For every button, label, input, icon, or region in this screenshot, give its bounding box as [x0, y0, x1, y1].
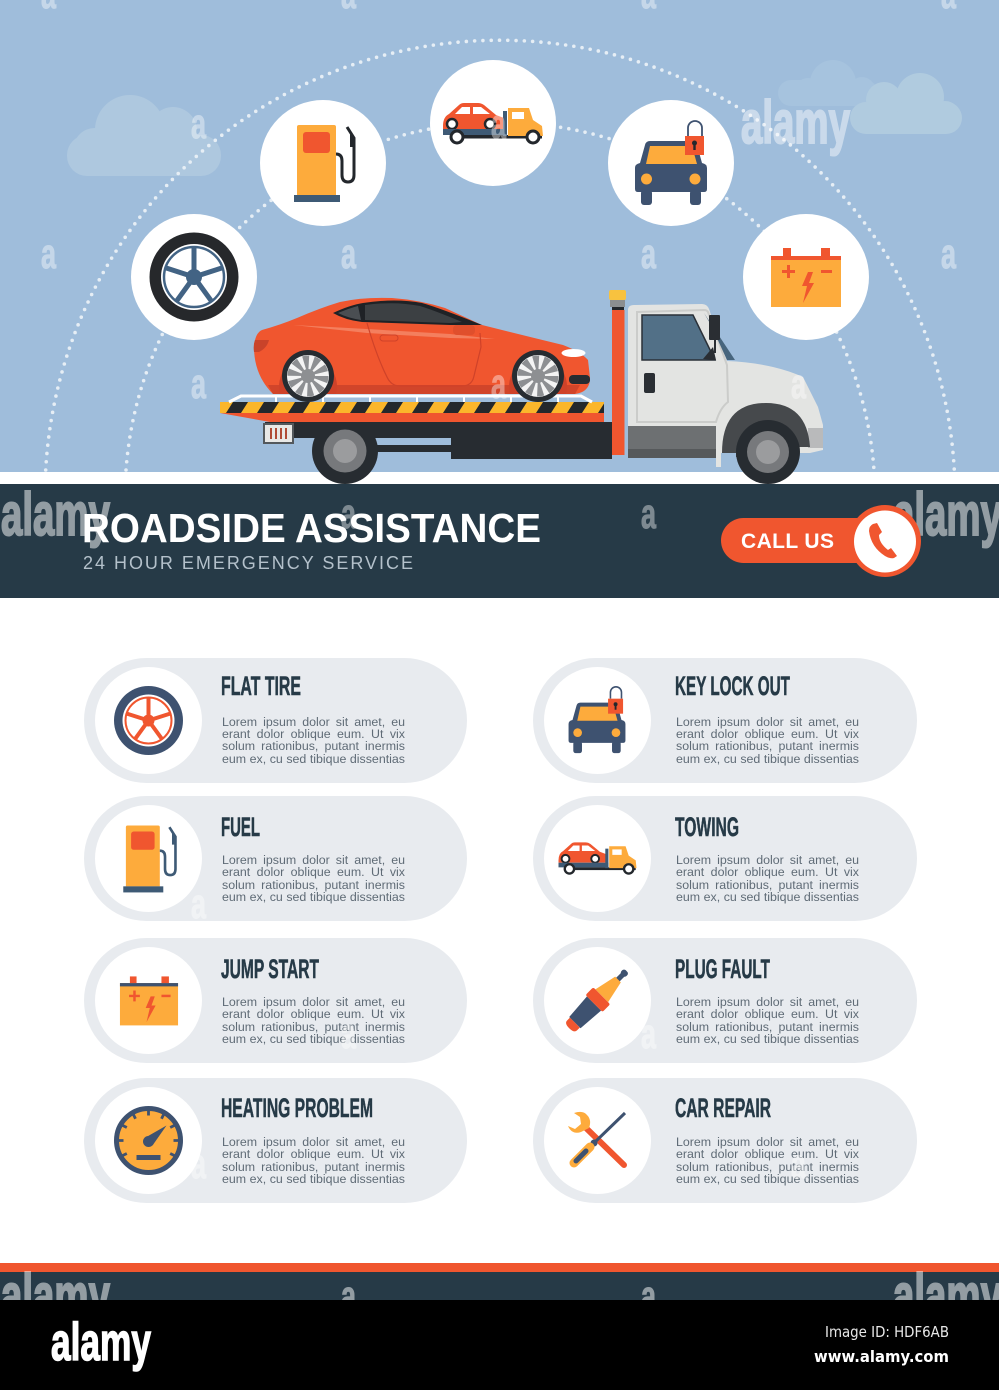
orange stripe: [0, 1263, 999, 1272]
car rear wheel: [279, 350, 337, 402]
watermarks: a: [791, 360, 806, 407]
cloud right back: [778, 60, 878, 106]
banner background: [0, 484, 999, 598]
card: towing: [533, 796, 917, 921]
wheel front: [736, 420, 800, 484]
description: Lorem ipsum dolor sit amet, eu: [222, 714, 405, 728]
watermarks: a: [191, 1140, 206, 1187]
description: [676, 1135, 859, 1186]
tow truck: [220, 290, 823, 484]
watermarks: a: [791, 1140, 806, 1187]
description: eum ex, cu sed tibique dissentias: [676, 752, 859, 766]
watermarks: a: [641, 490, 656, 537]
watermarks: a: [641, 1010, 656, 1057]
description: solum rationibus, putant inermis: [676, 878, 859, 892]
icon: fuel: [123, 825, 176, 892]
footer watermarks: [1, 1262, 999, 1329]
icon: tire: [114, 686, 183, 755]
watermarks: a: [41, 230, 56, 277]
ground strip: [0, 472, 999, 484]
circle icon: fuel: [260, 100, 386, 226]
cab: [628, 304, 823, 467]
description: erant dolor oblique eum. Ut vix: [676, 727, 859, 741]
watermarks: a: [191, 880, 206, 927]
dark stripe: [0, 1272, 999, 1300]
hero illustration: [0, 0, 999, 484]
rear light box: [264, 424, 293, 443]
footer watermarks: a: [641, 1272, 656, 1319]
truck chassis: [265, 422, 612, 459]
title: FUEL: [221, 812, 260, 842]
dotted arc outer: [46, 40, 954, 470]
description: erant dolor oblique eum. Ut vix: [222, 727, 405, 741]
title: CAR REPAIR: [675, 1093, 771, 1123]
description: eum ex, cu sed tibique dissentias: [222, 1172, 405, 1186]
description: erant dolor oblique eum. Ut vix: [222, 865, 405, 879]
subtitle: 24 HOUR EMERGENCY SERVICE: [83, 553, 413, 573]
circle icon: towing: [430, 60, 556, 186]
cloud right front: [850, 73, 962, 134]
icon: gauge: [116, 1108, 180, 1172]
title: JUMP START: [221, 954, 319, 984]
footer watermarks: alamy: [1, 1263, 110, 1329]
watermarks: a: [941, 230, 956, 277]
description: [222, 853, 405, 904]
stock logo: alamy: [51, 1313, 151, 1372]
watermarks: a: [341, 490, 356, 537]
description: erant dolor oblique eum. Ut vix: [676, 1147, 859, 1161]
description: eum ex, cu sed tibique dissentias: [222, 890, 405, 904]
description: Lorem ipsum dolor sit amet, eu: [676, 853, 859, 867]
description: [222, 714, 405, 766]
description: erant dolor oblique eum. Ut vix: [222, 1147, 405, 1161]
description: solum rationibus, putant inermis: [676, 1160, 859, 1174]
description: solum rationibus, putant inermis: [222, 1160, 405, 1174]
description: eum ex, cu sed tibique dissentias: [676, 1032, 859, 1046]
title: TOWING: [675, 812, 739, 842]
title: PLUG FAULT: [675, 954, 770, 984]
banner: [0, 484, 999, 598]
card: jump start: [84, 938, 467, 1063]
icon: spark plug: [561, 963, 635, 1037]
card: heating problem: [84, 1078, 467, 1203]
description: erant dolor oblique eum. Ut vix: [222, 1007, 405, 1021]
watermarks: a: [491, 100, 506, 147]
circle icon: battery: [743, 214, 869, 340]
watermarks: a: [191, 360, 206, 407]
description: erant dolor oblique eum. Ut vix: [676, 1007, 859, 1021]
description: eum ex, cu sed tibique dissentias: [222, 1032, 405, 1046]
wheel rear: [312, 418, 378, 484]
description: [676, 714, 859, 766]
card: fuel: [84, 796, 467, 921]
description: eum ex, cu sed tibique dissentias: [676, 1172, 859, 1186]
description: [222, 1135, 405, 1186]
icon: phone: [869, 523, 897, 558]
flatbed: [220, 396, 604, 422]
icon: tow truck: [558, 842, 636, 874]
sky: [0, 0, 999, 472]
call us button: [721, 505, 921, 577]
watermarks: a: [341, 1010, 356, 1057]
wheel arch: [722, 403, 810, 457]
circle icon: tire: [131, 214, 257, 340]
main title: ROADSIDE ASSISTANCE: [82, 505, 541, 551]
description: solum rationibus, putant inermis: [676, 739, 859, 753]
icon: tools: [568, 1112, 625, 1165]
description: Lorem ipsum dolor sit amet, eu: [222, 995, 405, 1009]
description: Lorem ipsum dolor sit amet, eu: [676, 995, 859, 1009]
description: eum ex, cu sed tibique dissentias: [676, 890, 859, 904]
description: Lorem ipsum dolor sit amet, eu: [222, 853, 405, 867]
black stock bar: [0, 1300, 999, 1390]
icon: battery: [120, 976, 178, 1025]
watermarks: a: [191, 100, 206, 147]
card: key lock out: [533, 658, 917, 783]
description: solum rationibus, putant inermis: [676, 1020, 859, 1034]
red car: [254, 298, 590, 402]
footer: [0, 1263, 999, 1390]
watermarks: alamy: [741, 89, 850, 156]
description: Lorem ipsum dolor sit amet, eu: [676, 714, 859, 728]
description: solum rationibus, putant inermis: [222, 1020, 405, 1034]
description: eum ex, cu sed tibique dissentias: [222, 752, 405, 766]
description: solum rationibus, putant inermis: [222, 739, 405, 753]
circle icon: key lock out: [608, 100, 734, 226]
title: KEY LOCK OUT: [675, 671, 790, 701]
website: www.alamy.com: [814, 1347, 949, 1366]
title: FLAT TIRE: [221, 671, 301, 701]
description: [222, 995, 405, 1046]
card: plug fault: [533, 938, 917, 1063]
footer watermarks: a: [341, 1272, 356, 1319]
description: Lorem ipsum dolor sit amet, eu: [676, 1135, 859, 1149]
description: [676, 853, 859, 904]
icon: locked car: [569, 687, 625, 753]
car front wheel: [509, 350, 567, 402]
watermarks: a: [641, 230, 656, 277]
card: flat tire: [84, 658, 467, 783]
description: Lorem ipsum dolor sit amet, eu: [222, 1135, 405, 1149]
watermarks: a: [341, 230, 356, 277]
red post and beacon: [609, 290, 626, 455]
description: erant dolor oblique eum. Ut vix: [676, 865, 859, 879]
call us button: CALL US: [741, 530, 834, 553]
watermark logos in banner: [1, 481, 999, 548]
cloud left: [67, 95, 221, 176]
image id: Image ID: HDF6AB: [825, 1323, 949, 1341]
dotted arc inner: [126, 122, 874, 470]
watermarks: a: [491, 360, 506, 407]
card: car repair: [533, 1078, 917, 1203]
description: solum rationibus, putant inermis: [222, 878, 405, 892]
description: [676, 995, 859, 1046]
